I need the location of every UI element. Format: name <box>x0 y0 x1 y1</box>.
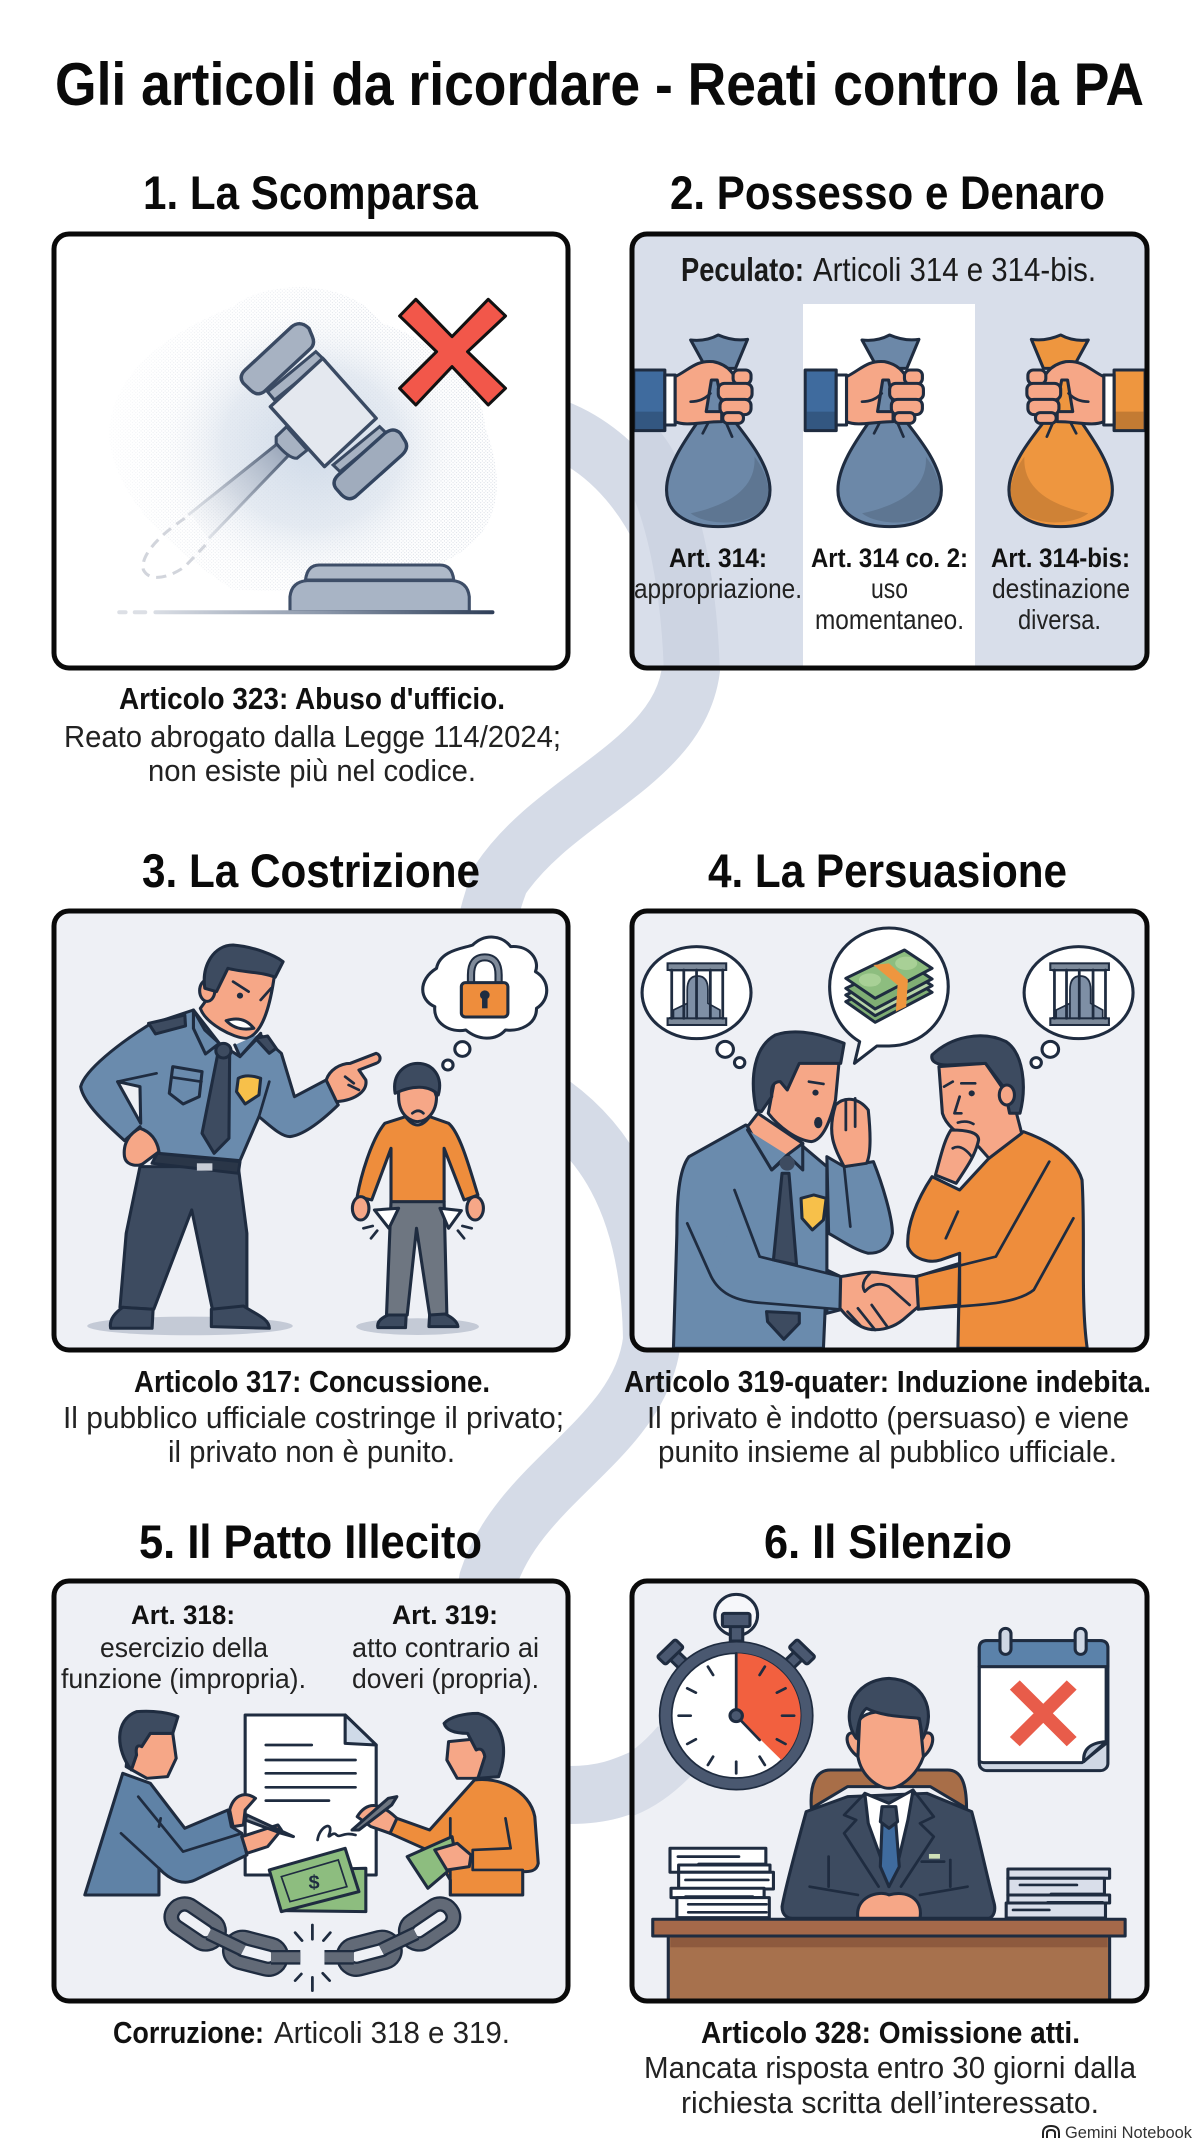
watermark: Gemini Notebook: Gemini Notebook <box>1065 2123 1192 2142</box>
figure: citizen signing <box>352 1713 538 1895</box>
text: art 314 co 2: momentaneo. <box>815 604 964 635</box>
text: art 314 co 2: uso <box>871 573 908 604</box>
figure: official signing <box>85 1711 293 1895</box>
caption: articolo 328: richiesta scritta dell’interessato. <box>681 2085 1099 2120</box>
text: art 318: Art. 318: <box>131 1600 235 1630</box>
icon: hand with blue bag 1 <box>634 335 770 527</box>
text: peculato: Articoli 314 e 314-bis. <box>813 251 1096 288</box>
caption: articolo 319-quater <box>624 1364 1151 1469</box>
icon: gavel <box>143 324 407 577</box>
panel: officer and citizen <box>54 911 568 1350</box>
text: art 314 co 2 <box>811 543 968 635</box>
caption: articolo 328: Articolo 328: Omissione atti. <box>701 2015 1080 2050</box>
heading: 5. Il Patto Illecito: 5. Il Patto Illecito <box>139 1515 482 1568</box>
text: art 314-bis: Art. 314-bis: <box>991 543 1130 573</box>
dotted halo <box>109 287 497 593</box>
figure: seated official <box>782 1678 995 1918</box>
icon: broken chain <box>166 1899 458 1991</box>
text: peculato: Peculato: <box>681 251 804 288</box>
icon: banknotes <box>269 1848 366 1912</box>
icon: citizen with empty pockets <box>352 1063 483 1335</box>
text: art 314 <box>634 543 802 604</box>
text: art 314: Art. 314: <box>669 543 767 573</box>
text: art 319 <box>352 1600 539 1694</box>
heading: 2. Possesso e Denaro: 2. Possesso e Denaro <box>670 166 1105 219</box>
panel: gavel illustration <box>54 234 568 668</box>
text: art 319: Art. 319: <box>392 1600 498 1630</box>
text: art 318: funzione (impropria). <box>61 1663 306 1694</box>
panel: peculato <box>610 234 1147 680</box>
heading: 6. Il Silenzio: 6. Il Silenzio <box>764 1515 1012 1568</box>
caption: articolo 317: Il pubblico ufficiale costringe il privato; <box>63 1400 564 1435</box>
figure: citizen thinking <box>908 1036 1087 1348</box>
figure: officer whispering <box>673 1032 892 1348</box>
icon: angry officer <box>81 945 380 1335</box>
text: peculato <box>681 251 1096 288</box>
caption: articolo 317: il privato non è punito. <box>168 1434 455 1469</box>
text: art 318: esercizio della <box>100 1632 268 1663</box>
caption: corruzione <box>113 2015 510 2050</box>
caption: articolo 317: Articolo 317: Concussione. <box>134 1364 490 1399</box>
caption: articolo 317 <box>63 1364 564 1469</box>
caption: articolo 323: Reato abrogato dalla Legge 114/2024; <box>64 719 561 754</box>
icon: paper stacks <box>670 1848 1110 1918</box>
icon: contract document <box>245 1715 376 1875</box>
thought bubble: left jail <box>642 947 751 1068</box>
heading: 1. La Scomparsa: 1. La Scomparsa <box>143 166 479 219</box>
caption: articolo 323 <box>64 681 561 788</box>
text: art 319: doveri (propria). <box>352 1663 539 1694</box>
heading: 4. La Persuasione: 4. La Persuasione <box>708 844 1067 897</box>
panel: persuasion handshake <box>632 911 1147 1350</box>
icon: hand with blue bag 2 <box>805 335 941 527</box>
panel: illicit pact <box>54 1581 568 2001</box>
text: art 314-bis: diversa. <box>1018 604 1101 635</box>
icon: banknotes: $ <box>309 1872 320 1893</box>
caption: articolo 319-quater: punito insieme al pubblico ufficiale. <box>658 1434 1117 1469</box>
icon: calendar with cross <box>979 1628 1108 1771</box>
panel: silence official <box>590 1581 1147 2002</box>
icon: stopwatch <box>657 1594 815 1790</box>
caption: corruzione: Articoli 318 e 319. <box>274 2015 510 2050</box>
caption: articolo 328: Mancata risposta entro 30 giorni dalla <box>644 2050 1137 2085</box>
text: art 319: atto contrario ai <box>352 1632 539 1663</box>
thought bubble: right jail <box>1024 947 1133 1068</box>
icon: red cross <box>400 299 505 405</box>
text: art 314: appropriazione. <box>634 573 802 604</box>
text: art 318 <box>61 1600 306 1694</box>
icon: hand with orange bag <box>1009 335 1145 527</box>
text: art 314-bis <box>991 543 1130 635</box>
text: art 314-bis: destinazione <box>992 573 1130 604</box>
caption: articolo 328 <box>644 2015 1137 2120</box>
icon: wooden desk <box>653 1919 1125 2002</box>
thought bubble: lock <box>423 937 547 1070</box>
caption: articolo 319-quater: Articolo 319-quater: Induzione indebita. <box>624 1364 1151 1399</box>
caption: corruzione: Corruzione: <box>113 2015 264 2050</box>
speech bubble: money stack <box>830 928 948 1063</box>
text: art 314 co 2: Art. 314 co. 2: <box>811 543 968 573</box>
caption: articolo 323: Articolo 323: Abuso d'ufficio. <box>119 681 505 716</box>
caption: articolo 319-quater: Il privato è indotto (persuaso) e viene <box>647 1400 1129 1435</box>
background ribbon <box>479 420 692 1795</box>
icon: sound block <box>119 565 492 612</box>
caption: articolo 323: non esiste più nel codice. <box>148 753 476 788</box>
heading: 3. La Costrizione: 3. La Costrizione <box>142 844 480 897</box>
icon: handshake <box>840 1272 918 1330</box>
